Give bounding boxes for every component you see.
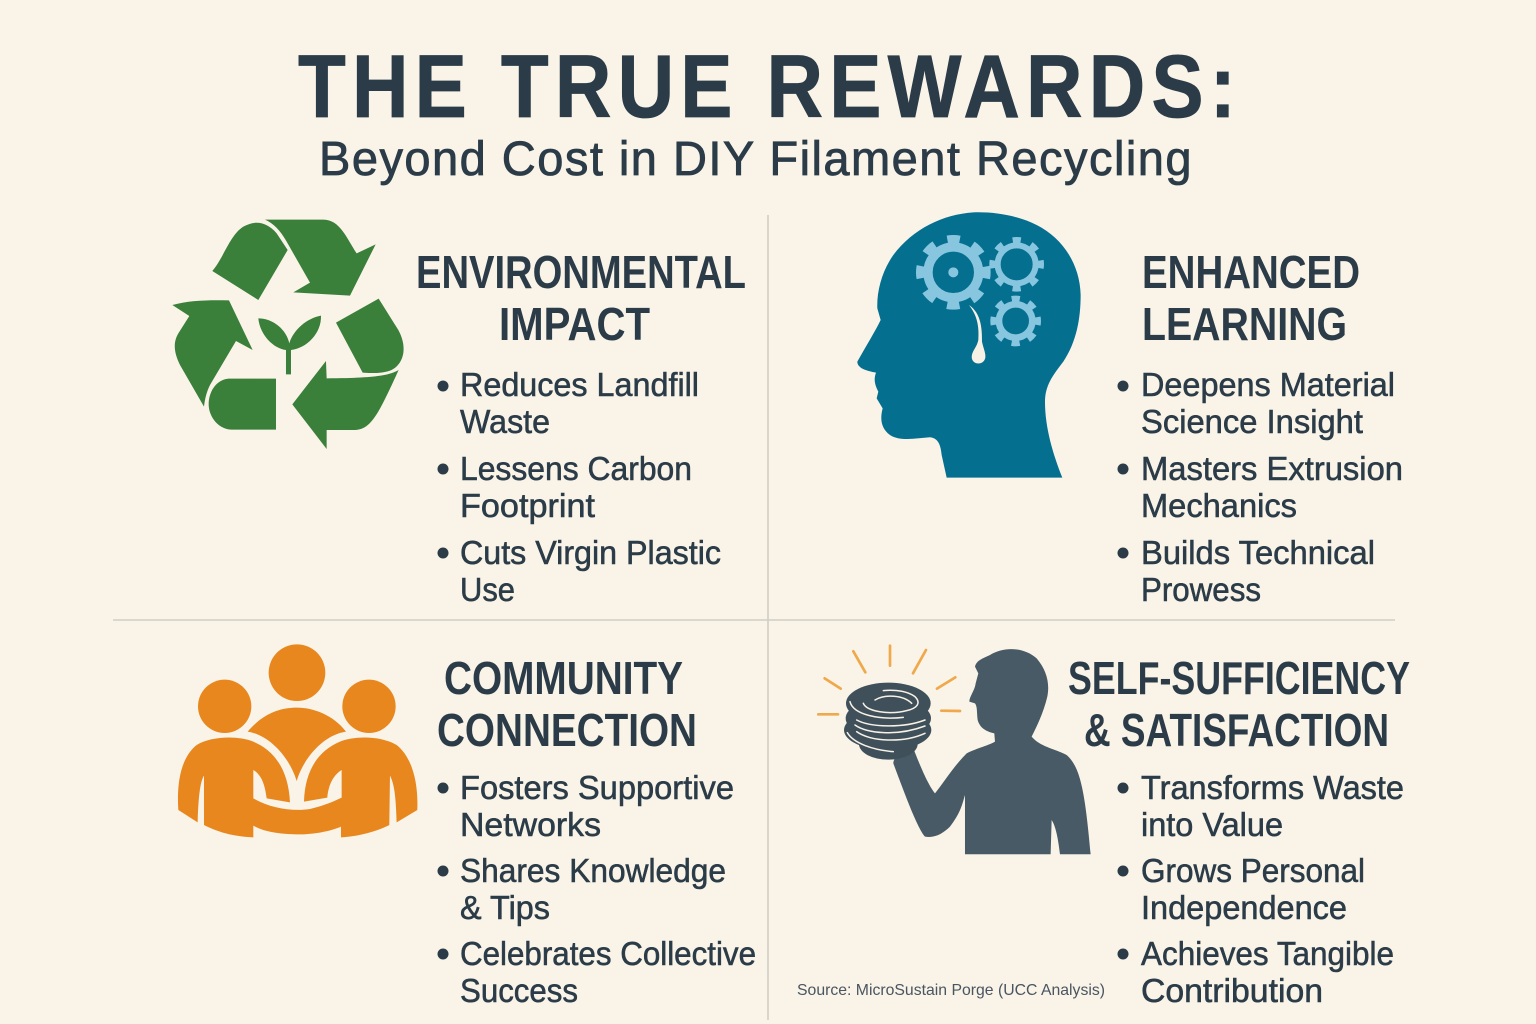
bullet list: community connection: Celebrates Collective — [460, 935, 756, 972]
bullet list: community connection — [438, 769, 756, 1009]
bullet list: self-sufficiency and satisfaction: Transforms Waste — [1141, 769, 1404, 806]
heading: community connection — [437, 652, 697, 756]
heading: environmental impact — [416, 246, 746, 350]
heading: self-sufficiency and satisfaction: & SATISFACTION — [1084, 704, 1389, 756]
bullet list: environmental impact: Lessens Carbon — [460, 450, 692, 487]
bullet list: environmental impact: Footprint — [460, 487, 595, 524]
panel: environmental impact — [172, 220, 746, 608]
bullet list: enhanced learning: Masters Extrusion — [1141, 450, 1403, 487]
bullet list: self-sufficiency and satisfaction: into Value — [1141, 806, 1283, 843]
panel: community connection — [178, 644, 756, 1009]
heading: community connection: COMMUNITY — [444, 652, 683, 704]
icon: person holding filament spool — [818, 646, 1091, 854]
bullet list: community connection: Success — [460, 972, 578, 1009]
heading: self-sufficiency and satisfaction — [1068, 652, 1410, 756]
heading: environmental impact: IMPACT — [499, 298, 650, 350]
heading: enhanced learning: ENHANCED — [1142, 246, 1360, 298]
bullet list: enhanced learning: Prowess — [1141, 571, 1261, 608]
bullet list: enhanced learning: Science Insight — [1141, 403, 1363, 440]
panel: enhanced learning — [857, 212, 1403, 608]
icon: recycling arrows with sprout — [172, 220, 404, 449]
bullet list: community connection: Fosters Supportive — [460, 769, 734, 806]
bullet list: enhanced learning: Builds Technical — [1141, 534, 1375, 571]
heading: environmental impact: ENVIRONMENTAL — [416, 246, 746, 298]
bullet list: enhanced learning: Mechanics — [1141, 487, 1297, 524]
bullet list: environmental impact: Reduces Landfill — [460, 366, 699, 403]
heading: enhanced learning: LEARNING — [1142, 298, 1347, 350]
bullet list: environmental impact: Waste — [460, 403, 550, 440]
bullet list: enhanced learning: Deepens Material — [1141, 366, 1395, 403]
bullet list: environmental impact: Cuts Virgin Plastic — [460, 534, 721, 571]
icon: head with gears — [857, 212, 1081, 478]
heading: self-sufficiency and satisfaction: SELF-SUFFICIENCY — [1068, 652, 1410, 704]
bullet list: community connection: Networks — [460, 806, 601, 843]
bullet list: self-sufficiency and satisfaction — [1118, 769, 1404, 1009]
bullet list: community connection: & Tips — [460, 889, 550, 926]
bullet list: self-sufficiency and satisfaction: Achieves Tangible — [1141, 935, 1394, 972]
title: THE TRUE REWARDS: — [298, 36, 1242, 136]
bullet list: environmental impact — [438, 366, 721, 608]
heading: community connection: CONNECTION — [437, 704, 697, 756]
bullet list: self-sufficiency and satisfaction: Independence — [1141, 889, 1347, 926]
bullet list: self-sufficiency and satisfaction: Contribution — [1141, 972, 1323, 1009]
panel: self-sufficiency and satisfaction — [818, 646, 1410, 1009]
icon: three people linked — [178, 644, 417, 837]
subtitle: Beyond Cost in DIY Filament Recycling — [319, 133, 1193, 186]
bullet list: self-sufficiency and satisfaction: Grows Personal — [1141, 852, 1365, 889]
source note: Source: MicroSustain Porge (UCC Analysis) — [797, 982, 1105, 999]
heading: enhanced learning — [1142, 246, 1360, 350]
bullet list: environmental impact: Use — [460, 571, 515, 608]
bullet list: enhanced learning — [1118, 366, 1403, 608]
bullet list: community connection: Shares Knowledge — [460, 852, 726, 889]
